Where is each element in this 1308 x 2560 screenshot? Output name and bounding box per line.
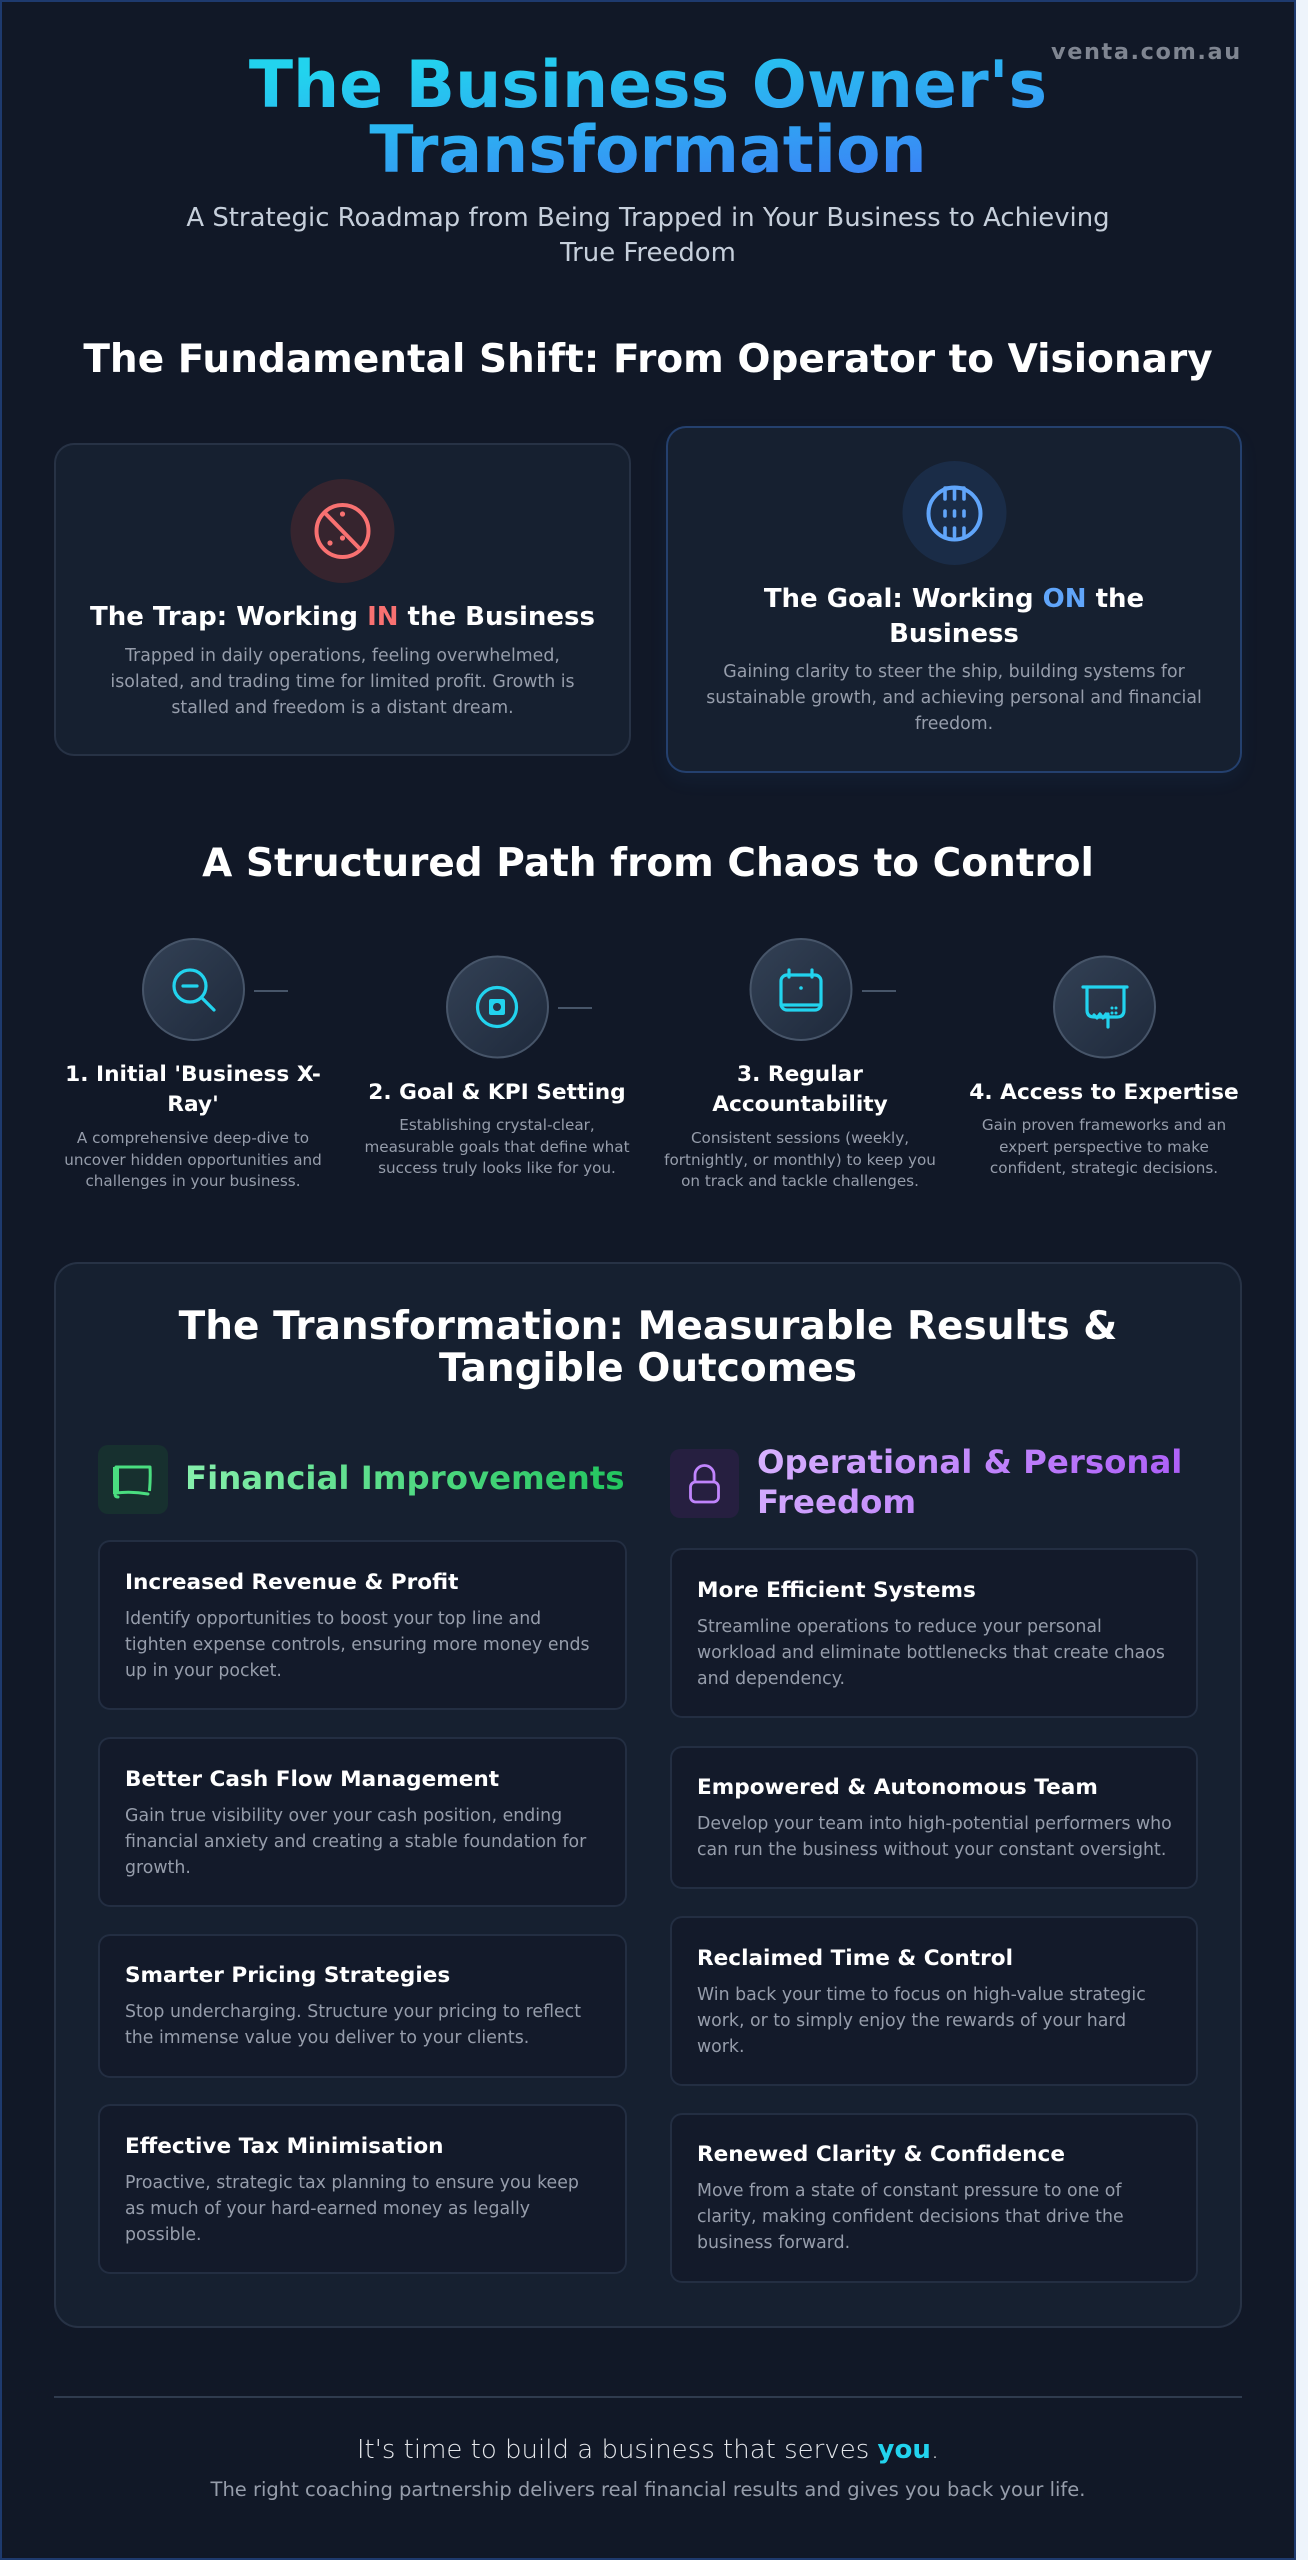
step 3 description	[664, 1129, 936, 1190]
step 1 description: uncover hidden opportunities and	[64, 1150, 322, 1168]
card: systems: Streamline operations to reduce your personal	[697, 1617, 1102, 1637]
trap description	[110, 646, 575, 718]
icon: calendar	[750, 938, 852, 1041]
transformation heading: Tangible Outcomes	[439, 1346, 857, 1391]
card: tax: possible.	[125, 2225, 202, 2245]
step 3 heading: Accountability	[712, 1092, 888, 1116]
card: tax: Proactive, strategic tax planning to ensure you keep	[125, 2173, 579, 2193]
closing subtext: The right coaching partnership delivers real financial results and gives you back your life.	[211, 2478, 1085, 2501]
card: pricing: Smarter Pricing Strategies	[125, 1963, 450, 1988]
panel: the goal	[666, 426, 1242, 773]
financial heading: Financial Improvements	[185, 1459, 625, 1497]
icon: target	[446, 956, 549, 1058]
step 1 heading	[65, 1062, 321, 1116]
step 3 description: Consistent sessions (weekly,	[691, 1129, 909, 1147]
step 4 description: Gain proven frameworks and an	[982, 1116, 1226, 1134]
card: pricing	[98, 1934, 627, 2078]
card: time: work, or to simply enjoy the rewards of your hard	[697, 2011, 1126, 2031]
trap description: stalled and freedom is a distant dream.	[171, 698, 514, 718]
card: clarity: Renewed Clarity & Confidence	[697, 2142, 1065, 2167]
card: clarity: Move from a state of constant pressure to one of	[697, 2181, 1121, 2201]
icon: lock	[670, 1449, 739, 1518]
icon: building	[902, 461, 1006, 565]
card: revenue: Identify opportunities to boost your top line and	[125, 1609, 541, 1629]
card: team: Develop your team into high-potential performers who	[697, 1814, 1172, 1834]
card: team: can run the business without your constant oversight.	[697, 1840, 1166, 1860]
trap description: isolated, and trading time for limited profit. Growth is	[110, 672, 575, 692]
panel: the transformation	[54, 1262, 1242, 2328]
step 4 description: expert perspective to make	[999, 1138, 1209, 1156]
operational heading: Operational & Personal	[757, 1443, 1182, 1481]
heading: structured path: A Structured Path from Chaos to Control	[202, 841, 1094, 886]
goal description: freedom.	[915, 714, 993, 734]
goal heading: Business	[889, 619, 1019, 649]
card: tax	[98, 2104, 627, 2274]
trap description: Trapped in daily operations, feeling overwhelmed,	[125, 646, 560, 666]
connector	[254, 990, 288, 992]
step 3 description: on track and tackle challenges.	[681, 1172, 919, 1190]
step 3 heading	[712, 1062, 888, 1116]
step 3 description: fortnightly, or monthly) to keep you	[664, 1150, 936, 1168]
subtitle	[186, 203, 1110, 268]
card: time	[670, 1916, 1198, 2086]
card: team	[670, 1746, 1198, 1889]
step 1 description: A comprehensive deep-dive to	[77, 1129, 309, 1147]
step 1 heading: 1. Initial 'Business X-	[65, 1062, 321, 1087]
card: cash flow: Better Cash Flow Management	[125, 1767, 499, 1792]
card: systems: workload and eliminate bottlenecks that create chaos	[697, 1643, 1165, 1663]
subtitle: True Freedom	[560, 238, 736, 268]
step 4 description	[982, 1116, 1226, 1177]
title	[54, 53, 1242, 183]
operational heading: Freedom	[757, 1483, 916, 1521]
title: The Business Owner's	[249, 48, 1047, 123]
connector	[558, 1007, 592, 1008]
heading: fundamental shift: The Fundamental Shift: From Operator to Visionary	[83, 337, 1213, 382]
step 2 description: Establishing crystal-clear,	[399, 1116, 595, 1134]
card: systems: More Efficient Systems	[697, 1578, 976, 1603]
card: cash flow: Gain true visibility over your cash position, ending	[125, 1806, 562, 1826]
step 2	[364, 956, 630, 1177]
icon: presentation board	[1053, 956, 1156, 1058]
column: operational and personal freedom	[670, 1443, 1198, 2283]
icon: prohibited	[290, 479, 394, 583]
card: clarity: clarity, making confident decisions that drive the	[697, 2207, 1124, 2227]
card: time: work.	[697, 2037, 744, 2057]
goal description	[706, 662, 1202, 734]
card: tax: as much of your hard-earned money as legally	[125, 2199, 530, 2219]
card: time: Win back your time to focus on high-value strategic	[697, 1985, 1146, 2005]
subtitle: A Strategic Roadmap from Being Trapped in Your Business to Achieving	[186, 203, 1110, 233]
card: clarity	[670, 2113, 1198, 2283]
icon: wallet	[98, 1445, 168, 1514]
card: revenue	[98, 1540, 627, 1710]
step 1 description: challenges in your business.	[85, 1172, 301, 1190]
card: team: Empowered & Autonomous Team	[697, 1775, 1098, 1800]
step 2 description: success truly looks like for you.	[378, 1159, 616, 1177]
card: time: Reclaimed Time & Control	[697, 1946, 1013, 1971]
title: Transformation	[369, 113, 927, 188]
brand label: venta.com.au	[1051, 39, 1242, 65]
step 2 description: measurable goals that define what	[364, 1138, 630, 1156]
goal heading: The Goal: Working ON the	[764, 584, 1144, 614]
card: systems: and dependency.	[697, 1669, 845, 1689]
transformation heading: The Transformation: Measurable Results &	[179, 1304, 1117, 1349]
goal description: Gaining clarity to steer the ship, building systems for	[723, 662, 1185, 682]
step 4	[969, 956, 1239, 1177]
icon: magnifier	[142, 938, 245, 1041]
operational heading	[757, 1442, 1182, 1522]
card: tax: Effective Tax Minimisation	[125, 2134, 444, 2159]
card: pricing: the immense value you deliver to your clients.	[125, 2028, 529, 2048]
step 4 heading: 4. Access to Expertise	[969, 1080, 1239, 1105]
card: cash flow	[98, 1737, 627, 1907]
step 1 description	[64, 1129, 322, 1190]
connector	[862, 990, 896, 992]
card: clarity: business forward.	[697, 2233, 850, 2253]
step 1	[64, 938, 322, 1190]
step 2 description	[364, 1116, 630, 1177]
step 1 heading: Ray'	[167, 1092, 219, 1116]
card: revenue: tighten expense controls, ensuring more money ends	[125, 1635, 590, 1655]
step 3	[664, 938, 936, 1190]
goal heading	[764, 584, 1144, 649]
trap heading: The Trap: Working IN the Business	[90, 602, 595, 632]
goal description: sustainable growth, and achieving personal and financial	[706, 688, 1202, 708]
card: cash flow: financial anxiety and creating a stable foundation for	[125, 1832, 586, 1852]
card: pricing: Stop undercharging. Structure your pricing to reflect	[125, 2002, 581, 2022]
card: cash flow: growth.	[125, 1858, 191, 1878]
card: systems	[670, 1548, 1198, 1718]
step 2 heading: 2. Goal & KPI Setting	[368, 1080, 626, 1105]
card: revenue: Increased Revenue & Profit	[125, 1570, 458, 1595]
transformation heading	[178, 1304, 1117, 1391]
closing statement: It's time to build a business that serves you.	[357, 2435, 939, 2465]
card: revenue: up in your pocket.	[125, 1661, 282, 1681]
panel: the trap	[54, 443, 631, 756]
step 3 heading: 3. Regular	[737, 1062, 863, 1087]
column: financial improvements	[98, 1445, 627, 2274]
step 4 description: confident, strategic decisions.	[990, 1159, 1218, 1177]
